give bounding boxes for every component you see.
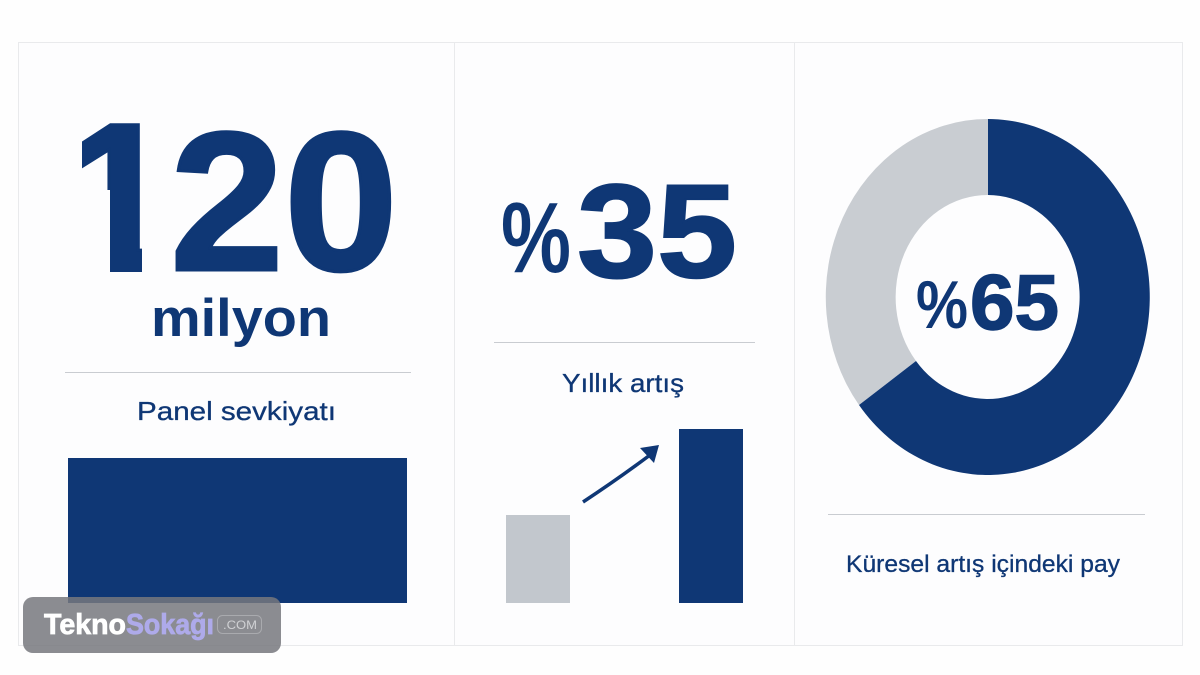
- label: Yıllık artış: Yıllık artış: [562, 368, 684, 398]
- unit: milyon: milyon: [151, 289, 331, 348]
- panel: panel shipments: [59, 79, 411, 603]
- logo: TeknoSokağı.com watermark: Tekno: [44, 609, 126, 641]
- navy block: [68, 458, 407, 603]
- big number: %35: [501, 158, 737, 306]
- logo: TeknoSokağı.com watermark: Sokağı: [126, 609, 214, 641]
- big number: 120: 20: [170, 91, 398, 312]
- donut value: %65: [916, 258, 1059, 346]
- big number: %35: %: [501, 182, 571, 294]
- donut segment: grey remainder: [826, 119, 988, 405]
- donut value: %65: %: [916, 267, 968, 343]
- big number: 120: [82, 123, 392, 274]
- arrow: growth: [583, 445, 659, 502]
- big number: %35: 35: [577, 158, 737, 306]
- panel: annual growth: [494, 158, 755, 603]
- big number: 120: 1: [59, 79, 178, 318]
- panel: global share: [826, 119, 1150, 578]
- bar: current: [679, 429, 743, 603]
- donut chart: [826, 119, 1150, 475]
- donut value: %65: 65: [970, 258, 1059, 346]
- logo: TeknoSokağı.com watermark: .COM: [223, 618, 257, 632]
- donut segment: navy 65%: [859, 119, 1150, 475]
- logo: TeknoSokağı.com watermark: [23, 597, 281, 653]
- label: Küresel artış içindeki pay: Küresel artış içindeki pay: [846, 551, 1120, 578]
- label: Panel sevkiyatı: Panel sevkiyatı: [137, 396, 336, 426]
- bar: previous: [506, 515, 570, 603]
